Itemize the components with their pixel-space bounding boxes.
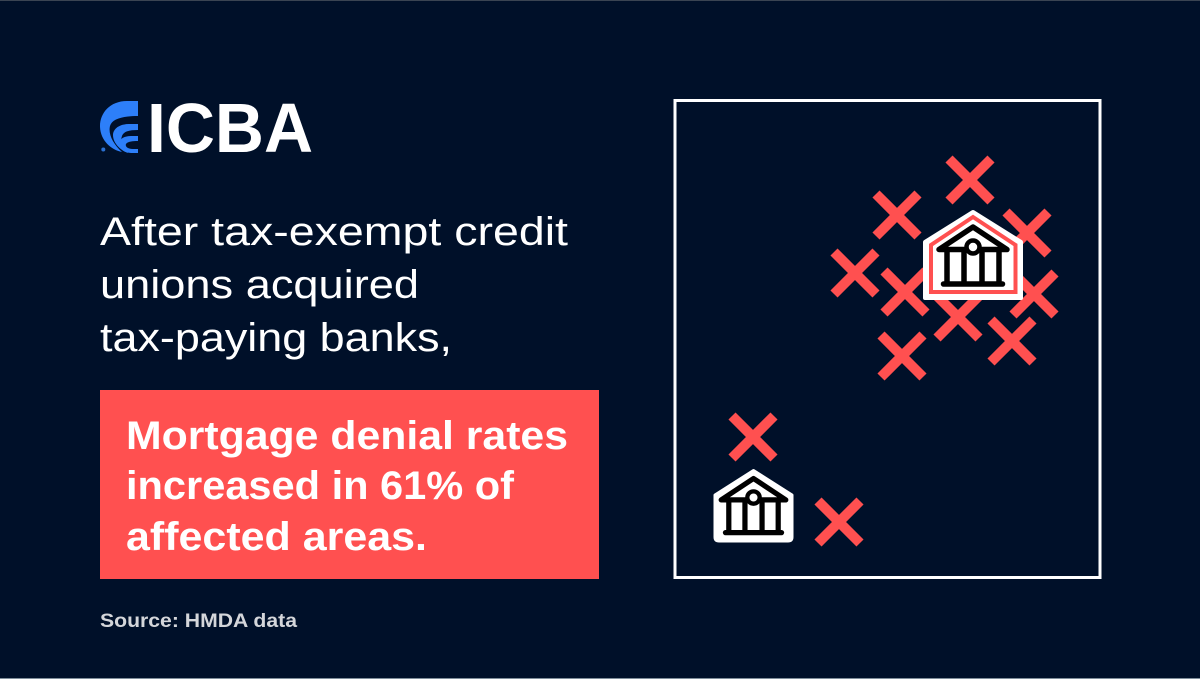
callout: mortgage denial rates: affected areas.: [126, 515, 427, 559]
logo: ICBA: [100, 89, 313, 167]
icon: ICBA swoosh mark: [100, 101, 138, 153]
intro text: After tax-exempt credit: [100, 210, 568, 254]
cluster of denial crosses: [834, 159, 1055, 377]
intro text: [100, 210, 568, 360]
callout: mortgage denial rates: Mortgage denial rates: [126, 414, 568, 458]
intro text: tax-paying banks,: [100, 316, 452, 360]
logo wordmark: ICBA: [147, 89, 313, 167]
callout: mortgage denial rates: increased in 61% of: [126, 464, 515, 508]
icon: bank: [715, 470, 792, 541]
sparse area crosses: [732, 416, 860, 543]
source note: Source: HMDA data: [100, 611, 297, 632]
callout: mortgage denial rates: [100, 390, 599, 579]
intro text: unions acquired: [100, 263, 419, 307]
map frame: [675, 100, 1100, 578]
icon: highlighted bank: [925, 212, 1021, 298]
